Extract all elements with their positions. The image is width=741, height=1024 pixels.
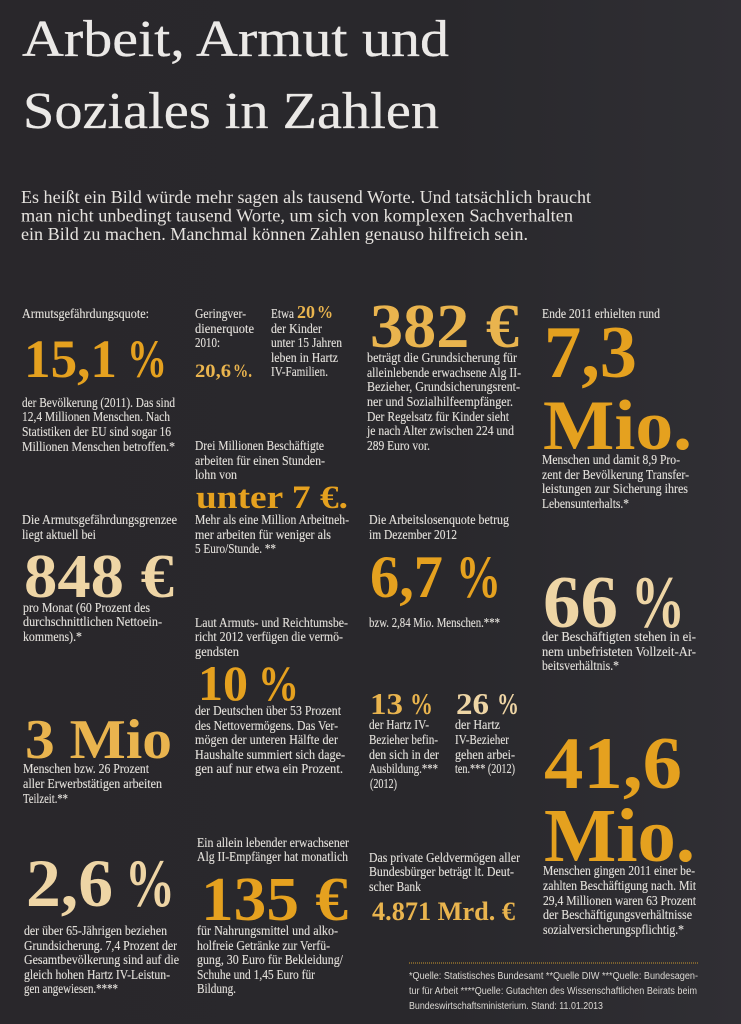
panel: Beschäftigung 41,6 Mio.: 29,4 Millionen waren 63 Prozent (543, 893, 696, 908)
number: 15,1 %: 15,1 (24, 329, 117, 389)
panel: Arbeitslosenquote: im Dezember 2012 (369, 527, 457, 542)
number: 10 % (198, 655, 299, 711)
panel: Armutsgefährdungsquote: Millionen Menschen betroffen.* (22, 439, 175, 454)
intro text: Es heißt ein Bild würde mehr sagen als tausend Worte. Und tatsächlich braucht (21, 187, 591, 207)
number: 20 %: % (317, 302, 333, 322)
panel: Armutsgefährdungsquote: Statistiken der EU sind sogar 16 (22, 424, 171, 439)
number: 20 %: 20 (297, 302, 315, 322)
panel: Hartz IV Ausbildung 13 %: Bezieher befin- (369, 732, 438, 747)
panel: Vollzeit 66 %: nem unbefristeten Vollzeit-Ar- (542, 644, 696, 659)
number: unter 7 €: unter 7 €. (196, 480, 348, 516)
number: 10 %: 10 (198, 655, 248, 711)
panel: Grundsicherung 382 Euro: 289 Euro vor. (367, 438, 430, 453)
panel: Armutsgefährdungsgrenze: durchschnittlichen Nettoein- (23, 614, 162, 629)
panel: Stundenlohn unter 7 Euro: Mehr als eine Million Arbeitneh- (195, 512, 349, 527)
number: 2,6 % (26, 845, 175, 921)
panel: Kinder in Hartz IV: unter 15 Jahren (271, 335, 342, 350)
title (22, 11, 449, 140)
panel: Armutsgefährdungsgrenze: pro Monat (60 Prozent des (23, 600, 150, 615)
panel: Armutsgefährdungsgrenze (22, 512, 177, 644)
panel: Armutsgefährdungsgrenze: liegt aktuell bei (22, 527, 96, 542)
panel: Transferleistungen 7,3 Mio.: leistungen zur Sicherung ihres (542, 481, 688, 496)
panel: Nettovermögen 10 %: der Deutschen über 53 Prozent (195, 703, 341, 718)
panel: Kinder in Hartz IV: IV-Familien. (271, 364, 328, 379)
panel: Nettovermögen 10 %: mögen der unteren Hälfte der (195, 732, 338, 747)
number: Mio.: Mio. (543, 387, 692, 465)
panel: Alg II 135 Euro: gung, 30 Euro für Bekleidung/ (197, 952, 343, 967)
panel: Geringverdienerquote: Geringver- (195, 306, 246, 321)
number: 3 Mio: 3 Mio (25, 709, 172, 771)
number: 13 % (370, 686, 433, 721)
panel: Stundenlohn unter 7 Euro: mer arbeiten für weniger als (195, 527, 331, 542)
panel: Armutsgefährdungsquote (22, 306, 175, 454)
panel: Stundenlohn unter 7 Euro: arbeiten für einen Stunden- (195, 453, 325, 468)
number: 41,6: 41,6 (544, 723, 682, 805)
number: 20,6 % (195, 361, 252, 382)
number: 66 %: 66 (543, 562, 618, 644)
panel: Transferleistungen 7,3 Mio.: zent der Bevölkerung Transfer- (542, 467, 689, 482)
panel: Kinder in Hartz IV (271, 302, 342, 379)
number: 10 %: % (258, 655, 299, 711)
footnote: sources: *Quelle: Statistisches Bundesamt **Quelle DIW ***Quelle: Bundesagen- (409, 971, 698, 982)
number: 4.871 Mrd. €: 4.871 Mrd. € (372, 897, 515, 926)
panel: Geringverdienerquote: 2010: (195, 335, 220, 350)
panel: Alg II 135 Euro: Bildung. (197, 981, 236, 996)
panel: Hartz IV Ausbildung 13 %: der Hartz IV- (369, 717, 429, 732)
panel: Teilzeit 3 Mio: aller Erwerbstätigen arbeiten (23, 776, 162, 791)
panel: Grundsicherung 382 Euro: je nach Alter zwischen 224 und (366, 423, 514, 438)
intro text: ein Bild zu machen. Manchmal können Zahlen genauso hilfreich sein. (21, 224, 528, 244)
number: 20,6 %: 20,6 (195, 361, 231, 382)
number: 382 €: 382 € (370, 293, 519, 361)
panel: Hartz IV arbeiten 26 %: ten.*** (2012) (455, 761, 515, 776)
panel: Nettovermögen 10 %: gendsten (195, 644, 239, 659)
number: 135 €: 135 € (201, 866, 348, 934)
panel: Nettovermögen 10 %: richt 2012 verfügen die vermö- (195, 629, 343, 644)
panel: Hartz IV Ausbildung 13 % (369, 686, 439, 791)
panel: Grundsicherung 2,6 %: Grundsicherung. 7,4 Prozent der (24, 938, 177, 953)
panel: Grundsicherung 382 Euro: Bezieher, Grundsicherungsrent- (367, 379, 520, 394)
panel: Hartz IV Ausbildung 13 %: den sich in der (369, 747, 439, 762)
panel: Transferleistungen 7,3 Mio. (542, 306, 692, 511)
panel: Arbeitslosenquote (369, 512, 509, 630)
panel: Transferleistungen 7,3 Mio.: Menschen und damit 8,9 Pro- (542, 452, 680, 467)
panel: Transferleistungen 7,3 Mio.: Lebensunterhalts.* (542, 496, 629, 511)
panel: Beschäftigung 41,6 Mio.: der Beschäftigungsverhältnisse (543, 907, 692, 922)
panel: Hartz IV Ausbildung 13 %: (2012) (370, 776, 397, 791)
number: 15,1 %: % (127, 329, 167, 389)
panel: Armutsgefährdungsgrenze: kommens).* (23, 629, 82, 644)
number: 6,7 % (370, 544, 501, 610)
panel: Nettovermögen 10 % (195, 615, 348, 776)
panel: Arbeitslosenquote: bzw. 2,84 Mio. Menschen.*** (369, 615, 500, 630)
number: 15,1 % (24, 329, 167, 389)
panel: Teilzeit 3 Mio (23, 709, 172, 806)
panel: Nettovermögen 10 %: des Nettovermögens. Das Ver- (195, 718, 338, 733)
panel: Geldvermögen: scher Bank (369, 879, 421, 894)
panel: Alg II 135 Euro: Ein allein lebender erwachsener (197, 835, 349, 850)
panel: Teilzeit 3 Mio: Menschen bzw. 26 Prozent (23, 761, 149, 776)
panel: Alg II 135 Euro (197, 835, 349, 996)
panel: Kinder in Hartz IV: Etwa (271, 306, 294, 321)
panel: Stundenlohn unter 7 Euro (195, 438, 349, 556)
panel: Alg II 135 Euro: für Nahrungsmittel und alko- (197, 923, 338, 938)
panel: Nettovermögen 10 %: Haushalte summiert sich dage- (195, 747, 345, 762)
panel: Grundsicherung 2,6 %: gen angewiesen.**** (24, 981, 118, 996)
panel: Geldvermögen (369, 850, 520, 926)
number: 26 %: 26 (456, 686, 489, 721)
panel: Beschäftigung 41,6 Mio. (543, 723, 696, 937)
number: 7,3: 7,3 (544, 312, 637, 394)
panel: Grundsicherung 2,6 %: gleich hohen Hartz IV-Leistun- (24, 967, 170, 982)
panel: Vollzeit 66 %: der Beschäftigten stehen in ei- (542, 629, 696, 644)
panel: Hartz IV Ausbildung 13 %: Ausbildung.*** (369, 761, 438, 776)
panel: Transferleistungen 7,3 Mio.: Ende 2011 erhielten rund (542, 306, 660, 321)
panel: Hartz IV arbeiten 26 %: gehen arbei- (455, 747, 515, 762)
panel: Nettovermögen 10 %: gen auf nur etwa ein Prozent. (195, 761, 343, 776)
panel: Nettovermögen 10 %: Laut Armuts- und Reichtumsbe- (195, 615, 348, 630)
panel: Armutsgefährdungsgrenze: Die Armutsgefährdungsgrenzee (22, 512, 177, 527)
footnote: sources (409, 971, 698, 1012)
panel: Armutsgefährdungsquote: Armutsgefährdungsquote: (22, 306, 149, 321)
panel: Vollzeit 66 % (542, 562, 696, 673)
panel: Grundsicherung 382 Euro: beträgt die Grundsicherung für (367, 350, 517, 365)
panel: Grundsicherung 382 Euro (366, 293, 521, 453)
panel: Teilzeit 3 Mio: Teilzeit.** (23, 791, 68, 806)
title: Soziales in Zahlen (23, 83, 439, 140)
panel: Beschäftigung 41,6 Mio.: zahlten Beschäftigung nach. Mit (543, 878, 696, 893)
number: 848 €: 848 € (24, 543, 174, 611)
number: 66 % (543, 562, 685, 644)
panel: Grundsicherung 2,6 % (24, 845, 179, 996)
intro text: man nicht unbedingt tausend Worte, um sich von komplexen Sachverhalten (21, 206, 573, 226)
number: Mio.: Mio. (544, 794, 695, 878)
number: 6,7 %: % (456, 544, 501, 610)
panel: Hartz IV arbeiten 26 %: IV-Bezieher (455, 732, 509, 747)
number: 6,7 %: 6,7 (370, 544, 443, 610)
number: 20,6 %: %. (233, 361, 252, 382)
panel: Beschäftigung 41,6 Mio.: Menschen gingen 2011 einer be- (543, 863, 695, 878)
panel: Geringverdienerquote (195, 306, 254, 382)
number: 13 %: % (410, 686, 433, 721)
panel: Beschäftigung 41,6 Mio.: sozialversicherungspflichtig.* (543, 922, 684, 937)
panel: Alg II 135 Euro: Schuhe und 1,45 Euro für (197, 967, 315, 982)
panel: Grundsicherung 382 Euro: Der Regelsatz für Kinder sieht (367, 409, 509, 424)
panel: Armutsgefährdungsquote: der Bevölkerung (2011). Das sind (22, 395, 175, 410)
intro text (21, 187, 591, 244)
panel: Kinder in Hartz IV: leben in Hartz (271, 350, 338, 365)
panel: Hartz IV arbeiten 26 %: der Hartz (455, 717, 500, 732)
panel: Grundsicherung 2,6 %: Gesamtbevölkerung sind auf die (24, 952, 179, 967)
number: 2,6 %: % (125, 845, 175, 921)
panel: Geldvermögen: Das private Geldvermögen aller (369, 850, 520, 865)
panel: Armutsgefährdungsquote: 12,4 Millionen Menschen. Nach (22, 409, 170, 424)
panel: Vollzeit 66 %: beitsverhältnis.* (542, 658, 619, 673)
panel: Hartz IV arbeiten 26 % (455, 686, 519, 776)
title: Arbeit, Armut und (22, 11, 449, 68)
panel: Grundsicherung 2,6 %: der über 65-Jährigen beziehen (24, 923, 167, 938)
number: 13 %: 13 (370, 686, 403, 721)
number: 66 %: % (631, 562, 685, 644)
panel: Alg II 135 Euro: Alg II-Empfänger hat monatlich (197, 849, 348, 864)
panel: Arbeitslosenquote: Die Arbeitslosenquote betrug (369, 512, 509, 527)
number: 26 % (456, 686, 519, 721)
panel: Geringverdienerquote: dienerquote (195, 321, 254, 336)
panel: Grundsicherung 382 Euro: alleinlebende erwachsene Alg II- (367, 365, 521, 380)
panel: Grundsicherung 382 Euro: ner und Sozialhilfeempfänger. (367, 394, 513, 409)
panel: Geldvermögen: Bundesbürger beträgt lt. Deut- (369, 864, 514, 879)
footnote: sources: tur für Arbeit ****Quelle: Gutachten des Wissenschaftlichen Beirats beim (409, 986, 697, 997)
panel: Stundenlohn unter 7 Euro: Drei Millionen Beschäftigte (195, 438, 324, 453)
footnote: sources: Bundeswirtschaftsministerium. Stand: 11.01.2013 (409, 1001, 603, 1012)
number: 2,6 %: 2,6 (26, 845, 113, 921)
panel: Kinder in Hartz IV: der Kinder (271, 321, 322, 336)
panel: Alg II 135 Euro: holfreie Getränke zur Verfü- (197, 938, 330, 953)
panel: Stundenlohn unter 7 Euro: 5 Euro/Stunde. ** (195, 541, 276, 556)
number: 20 % (297, 302, 333, 322)
number: 26 %: % (497, 686, 519, 721)
panel: Stundenlohn unter 7 Euro: lohn von (195, 467, 237, 482)
